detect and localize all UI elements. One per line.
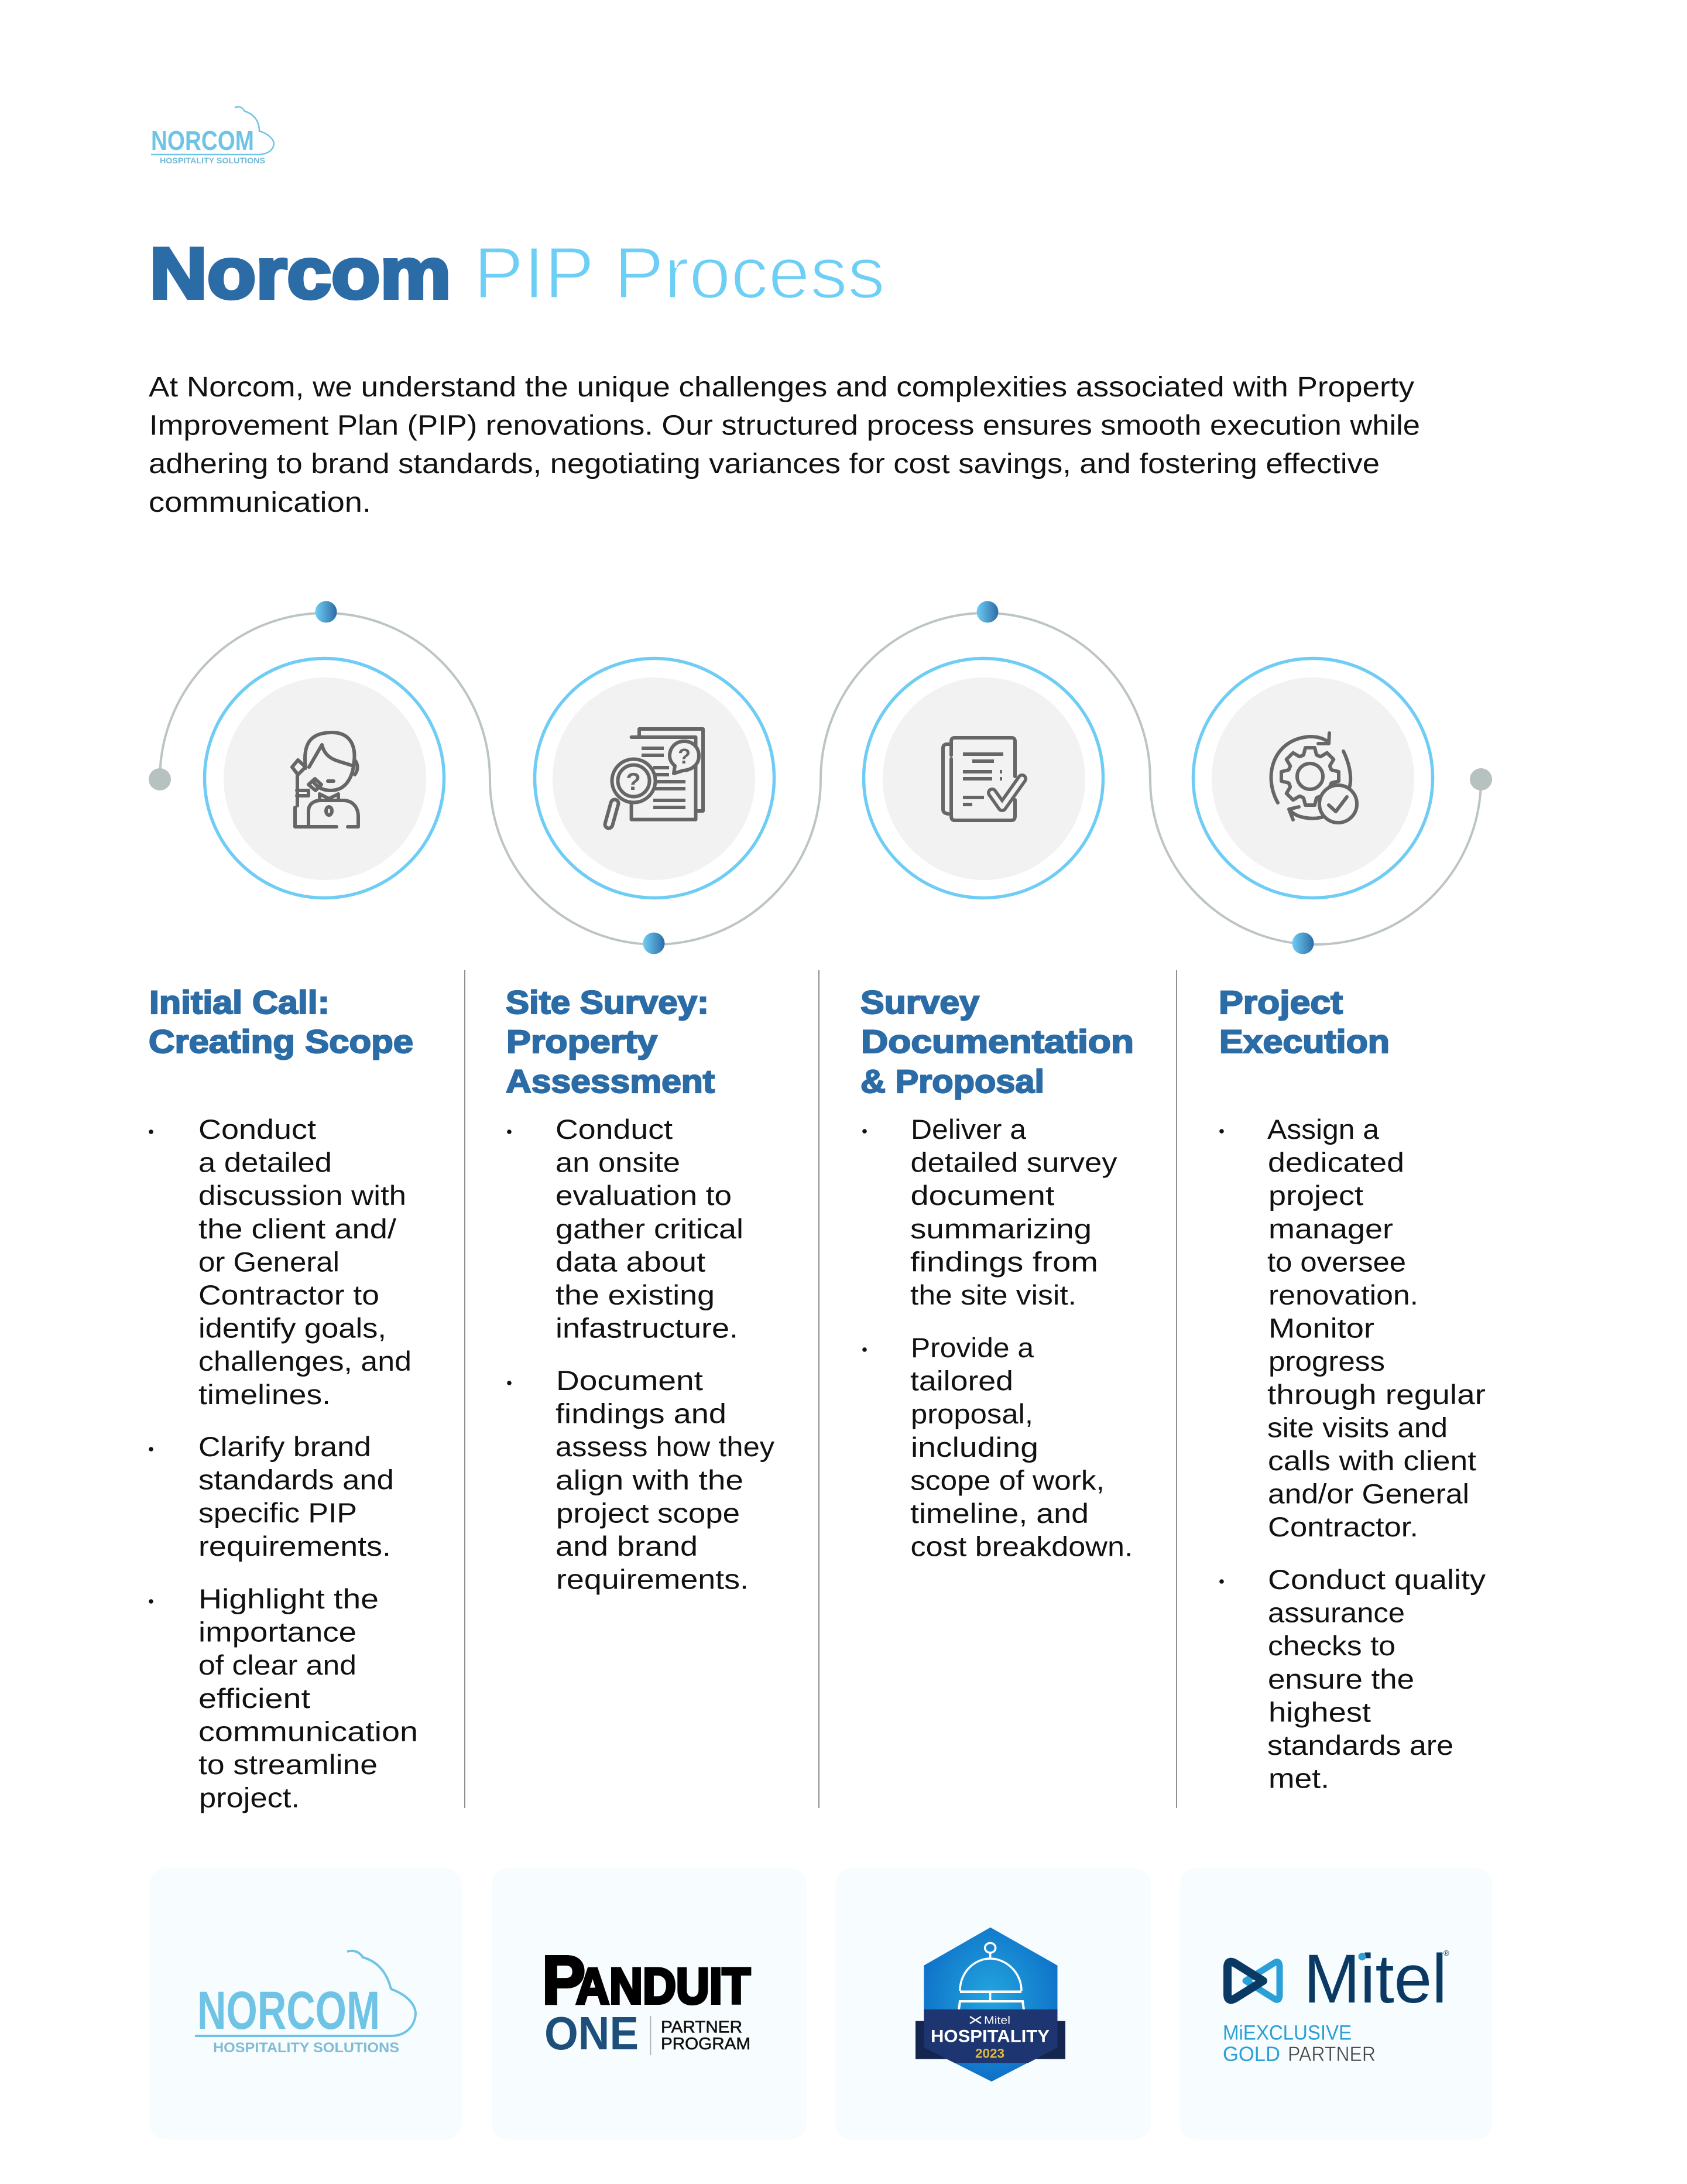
timeline end dot — [1470, 768, 1492, 790]
bullet list: Project Execution: dedicated — [1268, 1147, 1404, 1178]
bullet list: Survey Documentation: Deliver a — [911, 1114, 1027, 1145]
bullet list: Initial Call: the client and/ — [198, 1213, 397, 1244]
bullet list: Survey Documentation: detailed survey — [911, 1147, 1117, 1178]
logo: Norcom header: NORCOM — [151, 125, 254, 156]
bullet list: Initial Call: a detailed — [198, 1147, 332, 1178]
bullet list: Initial Call: identify goals, — [198, 1313, 386, 1344]
bullet list: Project Execution — [1219, 1114, 1486, 1794]
badge bell — [959, 1943, 1024, 2010]
bullet list: Project Execution: assurance — [1268, 1597, 1405, 1628]
bullet list: Survey Documentation: timeline, and — [910, 1498, 1089, 1529]
title: PIP Process — [474, 232, 885, 314]
logo: Norcom header: HOSPITALITY SOLUTIONS — [160, 156, 265, 165]
heading: Site Survey — [506, 984, 715, 1100]
bullet list: Site Survey: Document — [556, 1365, 703, 1396]
heading: Project Execution: Project — [1219, 984, 1343, 1021]
bullet list: Initial Call: Conduct — [198, 1114, 316, 1145]
title — [150, 232, 885, 314]
icon: agent with headset — [292, 732, 358, 827]
bullet list: Project Execution: through regular — [1267, 1379, 1486, 1410]
bullet list: Site Survey: and brand — [556, 1531, 698, 1562]
bullet list: Site Survey: the existing — [556, 1279, 715, 1310]
partner card: Panduit One: P — [542, 1942, 585, 2018]
logo: Norcom header — [151, 107, 274, 165]
bullet list: Project Execution: standards are — [1267, 1730, 1453, 1761]
bullet list: Project Execution: site visits and — [1267, 1412, 1448, 1443]
bullet list: Site Survey: data about — [556, 1246, 705, 1277]
bullet list: Project Execution: progress — [1268, 1346, 1385, 1377]
heading: Initial Call — [149, 984, 413, 1060]
heading: Survey Documentation and Proposal: Documentation — [861, 1023, 1134, 1060]
bullet list: Survey Documentation: proposal, — [911, 1398, 1033, 1429]
bullet list: Survey Documentation: cost breakdown. — [911, 1531, 1133, 1562]
bullet list: Site Survey: an onsite — [556, 1147, 680, 1178]
step 2 circle with document search icon — [535, 658, 774, 898]
column 2: Site Survey — [506, 984, 775, 1595]
bullet list: Initial Call: requirements. — [198, 1531, 391, 1562]
bullet list: Site Survey: assess how they — [556, 1431, 775, 1462]
bullet list: Initial Call: to streamline — [198, 1749, 378, 1780]
bullet list: Initial Call: timelines. — [198, 1379, 331, 1410]
bullet list: Initial Call: of clear and — [198, 1649, 356, 1680]
step 1 circle with person icon — [205, 658, 444, 898]
step 4 circle with gear icon — [1193, 658, 1433, 898]
heading: Project Execution: Execution — [1219, 1023, 1390, 1060]
bullet list: Survey Documentation: findings from — [910, 1246, 1098, 1277]
badge hexagon — [924, 1928, 1057, 2082]
bullet list: Project Execution: renovation. — [1268, 1279, 1418, 1310]
badge band — [924, 2010, 1057, 2063]
bullet list: Survey Documentation: summarizing — [910, 1213, 1092, 1244]
intro paragraph: adhering to brand standards, negotiating variances for cost savings, and fostering effective — [149, 449, 1380, 480]
column 1: Initial Call — [149, 984, 418, 1813]
partner card: Mitel Hospitality 2023 badge: Mitel — [984, 2015, 1010, 2026]
bullet list: Site Survey: project scope — [556, 1497, 740, 1528]
icon: documents and magnifier — [609, 729, 703, 824]
bullet list: Site Survey: evaluation to — [556, 1180, 732, 1211]
partner card: Panduit One — [492, 1868, 807, 2140]
heading: Project Execution — [1219, 984, 1390, 1060]
heading: Survey Documentation and Proposal — [860, 984, 1134, 1100]
heading: Initial Call: Creating Scope — [149, 1023, 413, 1060]
partner card: Mitel Hospitality 2023 badge — [835, 1868, 1151, 2140]
bullet list: Initial Call: challenges, and — [198, 1346, 412, 1377]
bullet list: Project Execution: and/or General — [1268, 1478, 1469, 1509]
column 4: Project Execution — [1219, 984, 1486, 1794]
blue dot 1 — [315, 601, 337, 623]
partner card: Panduit One: ONE — [544, 2007, 639, 2059]
Mitel symbol — [1227, 1962, 1280, 2000]
partner card: Mitel MiExclusive Gold Partner: MiEXCLUSIVE — [1223, 2021, 1352, 2044]
bullet list: Survey Documentation — [862, 1114, 1133, 1562]
heading: Survey Documentation and Proposal: Survey — [860, 984, 979, 1021]
intro paragraph: Improvement Plan (PIP) renovations. Our structured process ensures smooth execution while — [149, 410, 1420, 441]
column 3: Survey Documentation and Proposal — [860, 984, 1134, 1562]
partner card: Panduit One: ANDUIT — [576, 1959, 750, 2015]
column dividers — [465, 970, 1177, 1808]
heading: Site Survey: Assessment — [506, 1063, 715, 1100]
partner card: Mitel MiExclusive Gold Partner: GOLD — [1223, 2043, 1280, 2066]
partner card: Panduit One: PARTNER — [661, 2018, 742, 2037]
bullet list: Project Execution: Contractor. — [1268, 1511, 1418, 1542]
partner card: Mitel MiExclusive Gold Partner — [1179, 1868, 1492, 2140]
heading: Survey Documentation and Proposal: & Proposal — [860, 1063, 1044, 1100]
bullet list: Survey Documentation: tailored — [910, 1365, 1013, 1396]
bullet list: Survey Documentation: Provide a — [911, 1332, 1034, 1363]
timeline wave connector — [149, 601, 1492, 954]
bullet list: Initial Call: Clarify brand — [198, 1431, 371, 1462]
step 3 circle with checklist icon — [864, 658, 1103, 898]
icon: gear with check — [1271, 733, 1357, 823]
blue dot 2 — [643, 932, 665, 954]
bullet list: Project Execution: project — [1268, 1180, 1363, 1211]
partner card: Norcom: HOSPITALITY SOLUTIONS — [213, 2040, 399, 2056]
partner card: Norcom — [149, 1868, 462, 2140]
bullet list: Survey Documentation: the site visit. — [910, 1279, 1076, 1310]
bullet list: Initial Call: importance — [198, 1617, 356, 1648]
intro paragraph — [149, 372, 1420, 518]
partner card: Mitel Hospitality 2023 badge: 2023 — [975, 2046, 1004, 2060]
bullet list: Initial Call: Highlight the — [198, 1583, 379, 1614]
bullet list: Site Survey: gather critical — [556, 1213, 743, 1244]
partner card: Mitel MiExclusive Gold Partner: ® — [1443, 1949, 1449, 1957]
partner card: Panduit One: PROGRAM — [661, 2035, 750, 2053]
bullet list: Project Execution: Monitor — [1268, 1313, 1374, 1344]
bullet list: Project Execution: calls with client — [1268, 1445, 1476, 1476]
heading: Initial Call: Initial Call: — [149, 984, 330, 1021]
bullet list: Initial Call: specific PIP — [198, 1497, 357, 1528]
bullet list: Survey Documentation: document — [911, 1180, 1055, 1211]
bullet list: Survey Documentation: including — [911, 1432, 1038, 1463]
partner card: Mitel Hospitality 2023 badge: HOSPITALITY — [931, 2026, 1050, 2046]
bullet list: Project Execution: met. — [1268, 1763, 1329, 1794]
intro paragraph: At Norcom, we understand the unique challenges and complexities associated with Property — [149, 372, 1414, 403]
icon: document with checkmark — [943, 738, 1022, 820]
bullet list: Site Survey — [507, 1114, 775, 1595]
bullet list: Survey Documentation: scope of work, — [910, 1464, 1105, 1495]
step 2 circle with document search icon: ? — [678, 744, 691, 768]
blue dot 3 — [976, 601, 999, 623]
bullet list: Site Survey: requirements. — [556, 1564, 749, 1595]
title: Norcom — [150, 234, 451, 314]
badge ribbon — [915, 2021, 1065, 2059]
bullet list: Project Execution: checks to — [1268, 1630, 1395, 1661]
bullet list: Project Execution: manager — [1268, 1213, 1393, 1244]
partner card: Mitel MiExclusive Gold Partner: PARTNER — [1288, 2043, 1376, 2066]
bullet list: Site Survey: align with the — [556, 1464, 743, 1495]
bullet list: Site Survey: Conduct — [556, 1114, 673, 1145]
bullet list: Project Execution: Conduct quality — [1268, 1564, 1486, 1595]
heading: Site Survey: Site Survey: — [506, 984, 709, 1021]
bullet list: Project Execution: Assign a — [1267, 1114, 1380, 1145]
partner card: Norcom: NORCOM — [197, 1981, 380, 2041]
bullet list: Site Survey: findings and — [556, 1398, 726, 1429]
timeline start dot — [149, 768, 171, 790]
bullet list: Project Execution: to oversee — [1267, 1246, 1406, 1277]
bullet list: Initial Call — [149, 1114, 418, 1813]
bullet list: Initial Call: project. — [199, 1782, 300, 1813]
bullet list: Initial Call: or General — [198, 1246, 340, 1277]
bullet list: Initial Call: discussion with — [198, 1180, 406, 1211]
heading: Site Survey: Property — [506, 1023, 657, 1060]
bullet list: Initial Call: Contractor to — [198, 1279, 379, 1310]
bullet list: Initial Call: communication — [198, 1716, 418, 1747]
bullet list: Initial Call: standards and — [198, 1464, 394, 1495]
bullet list: Project Execution: ensure the — [1268, 1663, 1414, 1695]
partner card: Mitel MiExclusive Gold Partner: Mitel — [1304, 1940, 1447, 2018]
bullet list: Initial Call: efficient — [198, 1683, 310, 1714]
bullet list: Site Survey: infastructure. — [556, 1313, 738, 1344]
step 2 circle with document search icon: ? — [626, 768, 641, 795]
intro paragraph: communication. — [149, 487, 371, 518]
bullet list: Project Execution: highest — [1268, 1696, 1371, 1727]
blue dot 4 — [1292, 932, 1314, 954]
